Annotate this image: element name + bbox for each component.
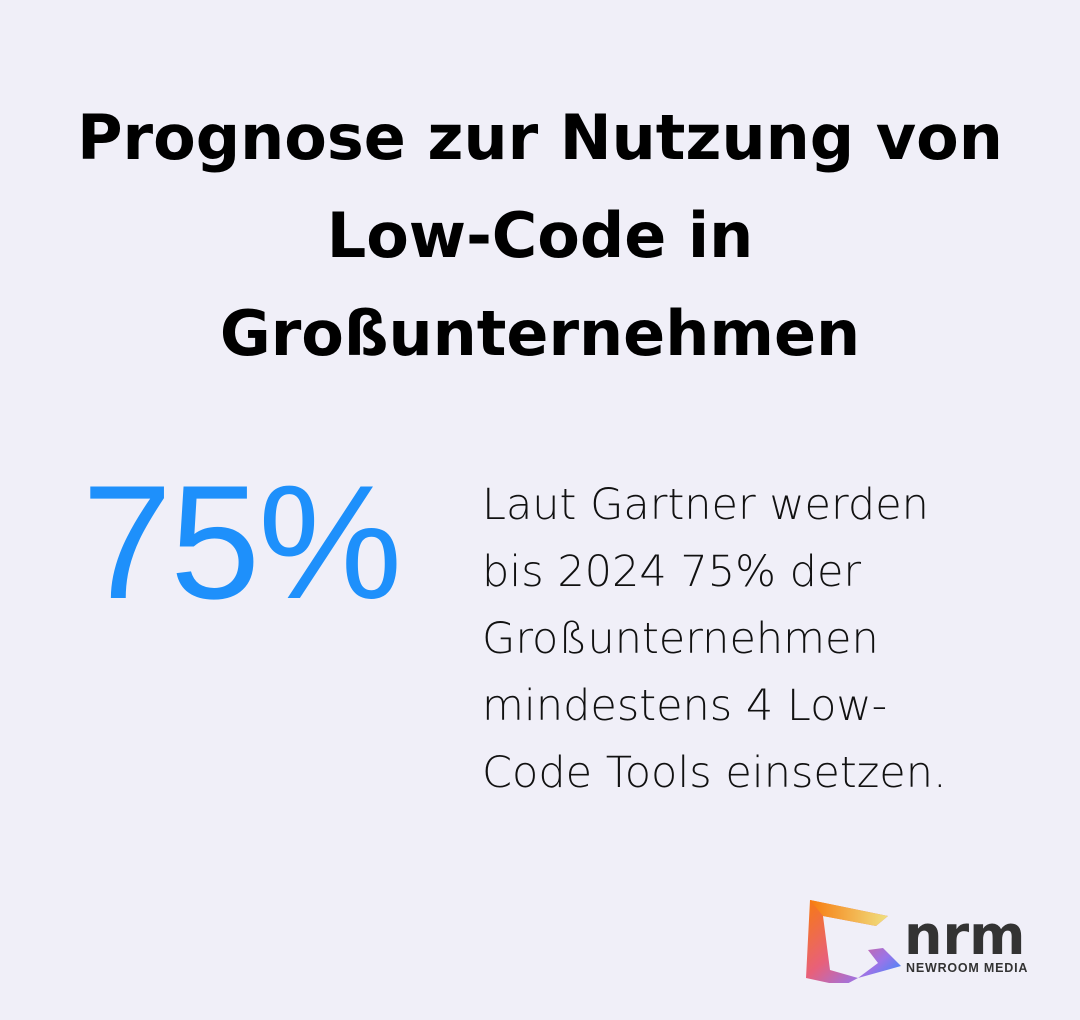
description text: bis 2024 75% der	[482, 547, 861, 597]
title	[77, 101, 1003, 370]
description text: Code Tools einsetzen.	[482, 748, 947, 798]
title: Low-Code in	[327, 199, 753, 272]
big statistic: 75%	[82, 452, 400, 633]
description text	[482, 480, 947, 798]
logo text: nrm	[904, 904, 1025, 967]
title: Prognose zur Nutzung von	[77, 101, 1003, 174]
logo	[806, 900, 1028, 983]
title: Großunternehmen	[220, 297, 860, 370]
description text: Laut Gartner werden	[482, 480, 929, 530]
description text: Großunternehmen	[482, 614, 879, 664]
icon: logo mark	[806, 900, 901, 986]
logo text: NEWROOM MEDIA	[906, 961, 1028, 975]
description text: mindestens 4 Low-	[482, 681, 887, 731]
